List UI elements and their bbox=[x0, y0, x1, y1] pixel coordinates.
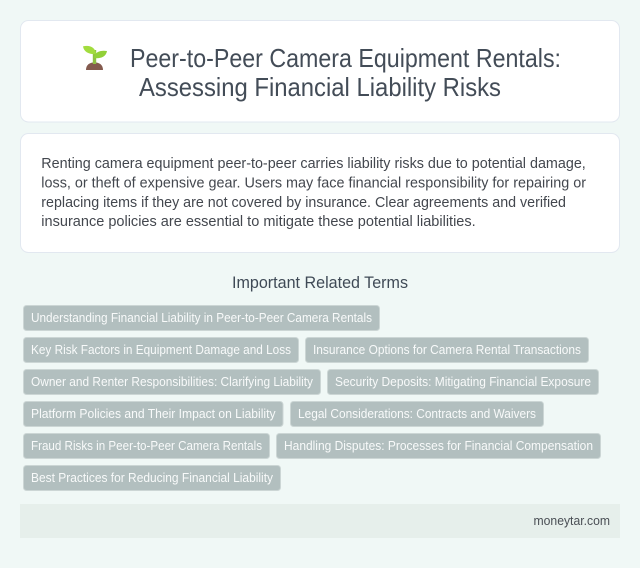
tag bbox=[24, 338, 298, 362]
panel: summary text card: loss, or theft of expensive gear. Users may face financial responsibility for repairing or bbox=[41, 176, 586, 192]
tag bbox=[24, 370, 320, 394]
tag: Handling Disputes: Processes for Financial Compensation bbox=[284, 438, 593, 453]
footer source text: moneytar.com bbox=[534, 513, 610, 528]
tag bbox=[24, 306, 380, 330]
panel: title card bbox=[20, 20, 620, 122]
tag: Understanding Financial Liability in Peer-to-Peer Camera Rentals bbox=[31, 310, 372, 325]
tag bbox=[24, 434, 270, 458]
tag: Owner and Renter Responsibilities: Clarifying Liability bbox=[31, 374, 314, 389]
tag bbox=[276, 434, 600, 458]
tag: Legal Considerations: Contracts and Waivers bbox=[298, 406, 536, 421]
title: Assessing Financial Liability Risks bbox=[139, 74, 501, 102]
tag bbox=[290, 402, 544, 426]
title bbox=[130, 45, 561, 102]
tag: Platform Policies and Their Impact on Liability bbox=[31, 406, 276, 421]
tag: Key Risk Factors in Equipment Damage and Loss bbox=[31, 342, 291, 357]
tag: Insurance Options for Camera Rental Transactions bbox=[313, 342, 581, 357]
icon: seedling bbox=[83, 46, 107, 70]
panel: summary text card: insurance policies are essential to mitigate these potential liabilities. bbox=[41, 214, 476, 230]
tag bbox=[24, 402, 283, 426]
heading: important related terms: Important Related Terms bbox=[232, 274, 408, 292]
panel: summary text card: replacing items if they are not covered by insurance. Clear agreements and verified bbox=[41, 195, 566, 211]
tag bbox=[24, 466, 280, 490]
panel: summary text card bbox=[20, 134, 620, 252]
tag list bbox=[24, 306, 600, 490]
tag bbox=[328, 370, 598, 394]
footer bar bbox=[20, 504, 620, 538]
tag: Best Practices for Reducing Financial Liability bbox=[31, 470, 274, 485]
panel: summary text card: Renting camera equipment peer-to-peer carries liability risks due to potential damage, bbox=[41, 156, 586, 172]
title: Peer-to-Peer Camera Equipment Rentals: bbox=[130, 45, 561, 73]
tag: Security Deposits: Mitigating Financial Exposure bbox=[335, 374, 591, 389]
tag: Fraud Risks in Peer-to-Peer Camera Rentals bbox=[31, 438, 262, 453]
tag bbox=[306, 338, 588, 362]
